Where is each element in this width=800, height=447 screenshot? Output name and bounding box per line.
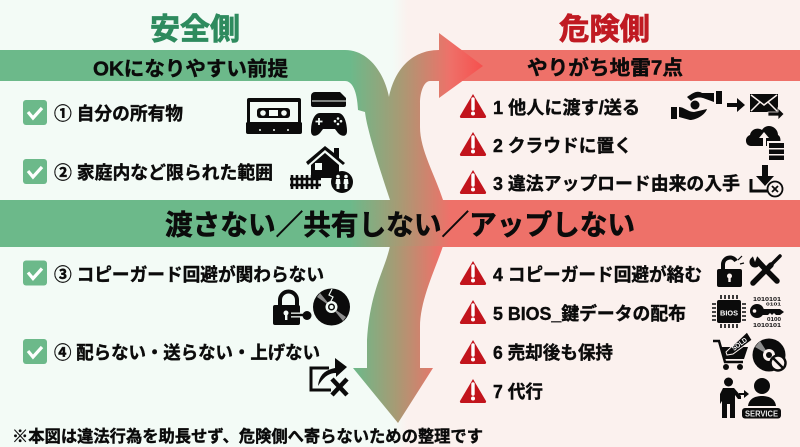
icon: share blocked (311, 358, 347, 395)
danger item 1: 1 他人に渡す/送る (493, 98, 640, 118)
icon: cracked disc (313, 288, 350, 326)
safe item 4: ④ 配らない・送らない・上げない (54, 343, 320, 363)
icon: cloud upload and server (746, 126, 785, 160)
danger item 7 (460, 379, 543, 403)
icon: key with binary data: 1010101 (753, 323, 781, 329)
icon: disc with prohibition sign (752, 338, 786, 372)
safe item 1: ① 自分の所有物 (54, 104, 183, 124)
icon: download blocked (751, 165, 782, 196)
icon: BIOS chip: BIOS (720, 308, 738, 318)
icon: person requesting a service: SERVICE (745, 408, 778, 418)
icon: key with binary data: 1010101 (753, 297, 781, 303)
safe item 2: ② 家庭内など限られた範囲 (54, 162, 273, 183)
danger item 3: 3 違法アップロード由来の入手 (493, 174, 740, 194)
danger item 7: 7 代行 (493, 382, 543, 402)
icon: arrow right (727, 98, 745, 112)
danger item 6 (460, 340, 613, 364)
icon: person requesting a service (720, 378, 781, 418)
icon: cart with sold tag: SOLD (731, 337, 749, 353)
safe item 1 (23, 100, 183, 125)
central band (0, 200, 800, 247)
icon: open padlock (717, 256, 744, 287)
icon: hands passing item (671, 91, 722, 120)
subheading: danger side: やりがち地雷7点 (527, 56, 683, 80)
icon: BIOS chip (712, 295, 746, 328)
subheading: safe side: OKになりやすい前提 (93, 58, 288, 80)
arrow: safe band curving into danger arrow (0, 33, 483, 200)
safe item 3: ③ コピーガード回避が関わらない (54, 264, 324, 285)
safe item 4 (23, 339, 320, 364)
icon: padlock with key (273, 292, 312, 325)
footnote: ※本図は違法行為を助長せず、危険側へ寄らないための整理です (12, 426, 483, 446)
danger item 4: 4 コピーガード回避が絡む (493, 264, 702, 285)
icon: house, fence and family (290, 146, 353, 193)
icon: cart with sold tag (713, 332, 752, 370)
arrow: downward arrow (353, 246, 443, 423)
icon: game controller (311, 113, 347, 136)
icon: wrench and screwdriver (750, 254, 780, 283)
icon: key with binary data: 0100 (767, 317, 781, 323)
danger item 1 (460, 94, 640, 118)
danger item 2: 2 クラウドに置く (493, 136, 632, 156)
icon: game console (311, 92, 346, 107)
header band: danger side (439, 50, 800, 81)
icon: cassette tape (246, 98, 302, 134)
heading: safe side: 安全側 (150, 14, 240, 46)
danger item 6: 6 売却後も保持 (493, 343, 613, 363)
icon: key with binary data (750, 297, 784, 329)
danger item 5: 5 BIOS_鍵データの配布 (493, 303, 686, 324)
central message: 渡さない／共有しない／アップしない (165, 210, 635, 240)
heading: danger side: 危険側 (559, 14, 650, 46)
icon: envelope with arrow (750, 94, 784, 120)
danger item 2 (460, 132, 632, 156)
safe item 2 (23, 159, 273, 184)
icon: key with binary data: 0101 (766, 302, 782, 306)
